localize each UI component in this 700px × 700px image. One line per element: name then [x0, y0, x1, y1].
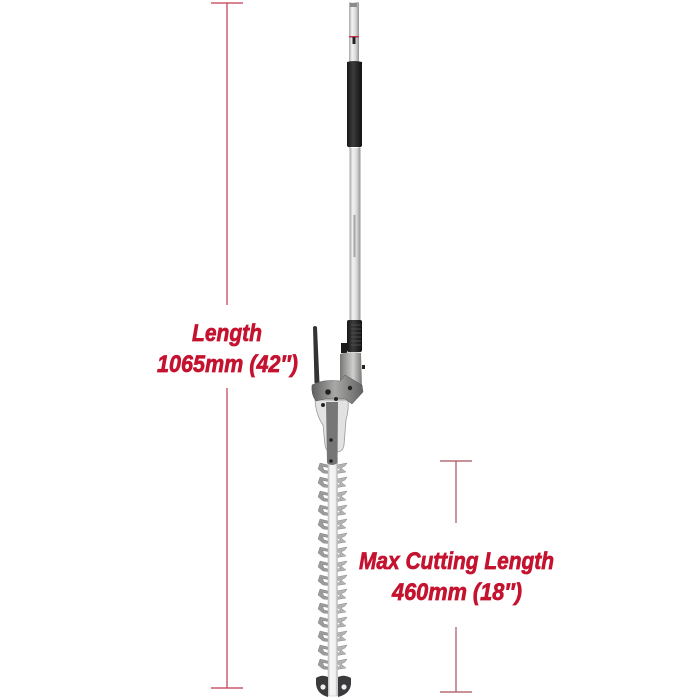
blade — [316, 458, 351, 697]
spine — [328, 458, 338, 696]
product: hedge trimmer attachment — [312, 2, 365, 697]
teeth — [318, 463, 347, 670]
label: total length: 1065mm (42″) — [157, 351, 298, 378]
gearbox bolts — [321, 386, 352, 407]
label: cutting length: Max Cutting Length — [359, 548, 554, 575]
label: cutting length: 460mm (18″) — [391, 579, 522, 606]
dimension line: total length — [211, 3, 243, 688]
tip guard — [316, 676, 351, 697]
foam grip — [347, 61, 362, 147]
label: cutting length — [359, 548, 554, 606]
shaft — [349, 2, 360, 322]
label: total length: Length — [192, 320, 262, 347]
motor housing — [340, 352, 362, 388]
bar fan guard — [315, 400, 348, 452]
adjuster lever — [313, 326, 320, 383]
gearbox — [312, 375, 363, 404]
connecting bar — [326, 402, 338, 465]
label: total length — [157, 320, 298, 378]
lower collar — [341, 320, 362, 353]
dimension line: cutting length — [440, 461, 472, 692]
